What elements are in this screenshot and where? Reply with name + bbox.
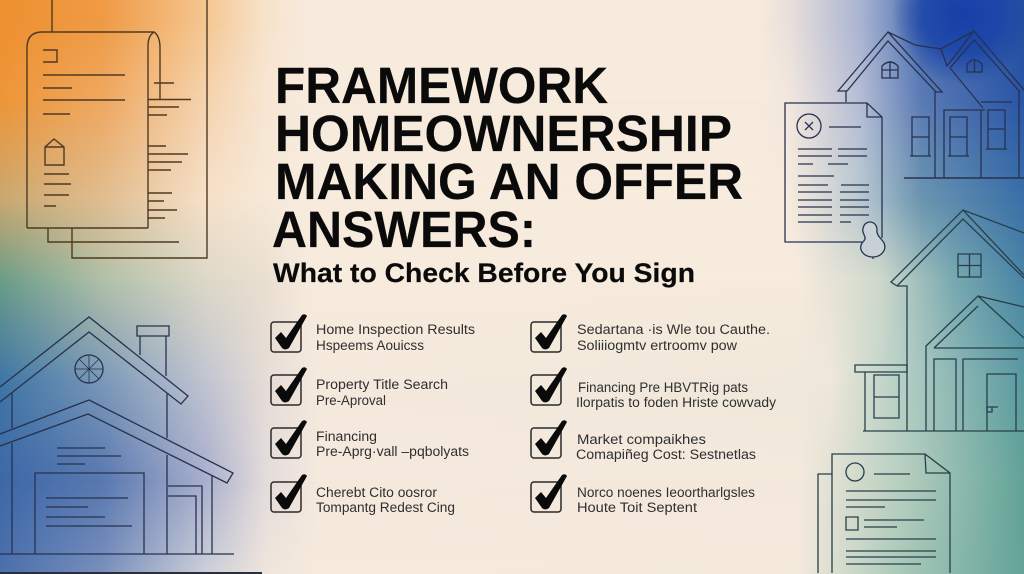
icon: wax seal <box>861 222 885 259</box>
checklist item 5: Sedartana ·is Wle tou Cauthe. <box>577 322 770 337</box>
checklist right column <box>531 314 776 515</box>
title <box>272 57 743 258</box>
checklist item 8: Norco noenes Ieoortharlgsles <box>577 485 755 500</box>
title: HOMEOWNERSHIP <box>275 105 732 162</box>
checklist item 8 <box>531 474 755 515</box>
icon: house with porch right side <box>855 210 1024 431</box>
title: MAKING AN OFFER <box>275 153 743 210</box>
checklist item 1 <box>271 314 475 353</box>
checklist item 1: Home Inspection Results <box>316 322 475 337</box>
checklist item 6: Financing Pre HBVTRig pats <box>578 380 748 395</box>
checklist item 2: Pre-Aproval <box>316 393 386 408</box>
checklist left column <box>271 314 475 515</box>
checklist item 2 <box>271 367 448 408</box>
checklist item 1: Hspeems Aouicss <box>316 338 424 353</box>
checklist item 5: Soliiiogmtv ertroomv pow <box>577 338 737 353</box>
checklist item 4 <box>271 474 455 515</box>
checklist item 6 <box>531 367 776 410</box>
bottom edge strip <box>0 572 262 574</box>
checklist item 5 <box>531 314 770 353</box>
subtitle: What to Check Before You Sign <box>273 258 695 288</box>
checklist item 8: Houte Toit Septent <box>577 500 697 515</box>
icon: house with garage bottom left <box>0 317 234 554</box>
icon: document stack top left <box>27 0 207 258</box>
icon: two-gable house top right <box>838 31 1024 178</box>
checklist item 3 <box>271 420 469 459</box>
checklist item 7: Comapiñeg Cost: Sestnetlas <box>576 447 756 462</box>
checklist item 7 <box>531 420 756 462</box>
checklist item 4: Cherebt Cito oosror <box>316 485 438 500</box>
checklist item 3: Financing <box>316 429 377 444</box>
checklist item 6: Ilorpatis to foden Hriste cowvady <box>576 395 776 410</box>
title: ANSWERS: <box>272 201 536 258</box>
checklist item 3: Pre-Aprg·vall –pqbolyats <box>316 444 469 459</box>
icon: document bottom right <box>818 454 950 573</box>
title: FRAMEWORK <box>275 57 608 114</box>
checklist item 4: Tompantg Redest Cing <box>316 500 455 515</box>
icon: contract document with seal <box>785 103 885 259</box>
checklist item 7: Market compaikhes <box>577 432 706 447</box>
checklist item 2: Property Title Search <box>316 377 448 392</box>
